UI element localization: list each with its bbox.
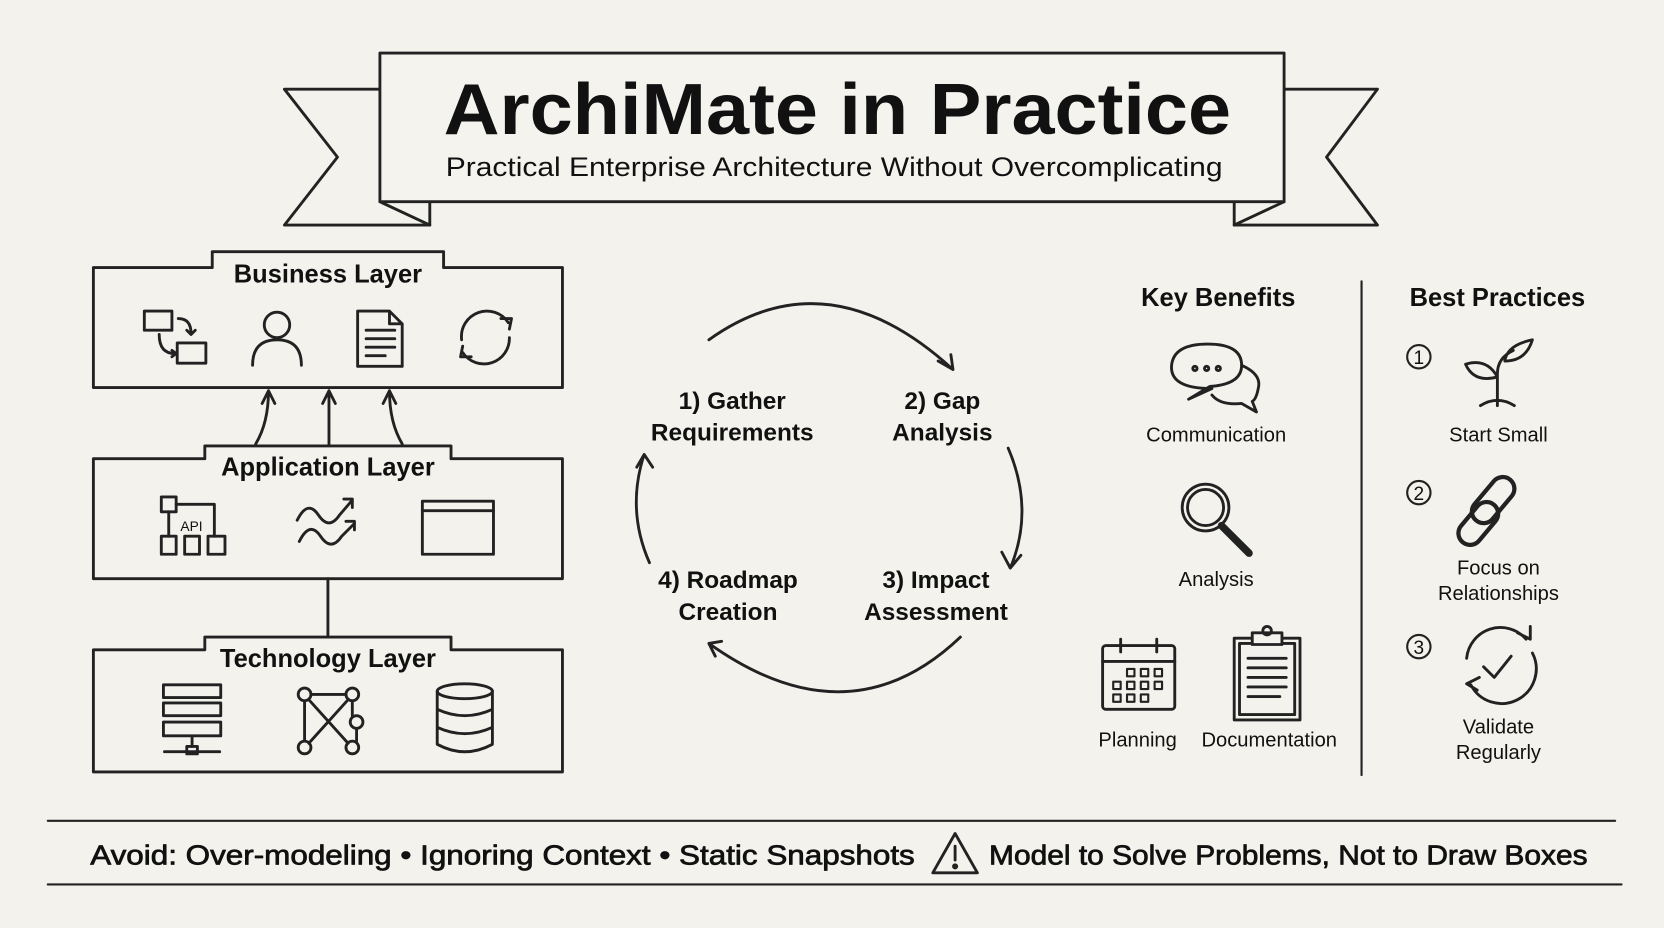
- cycle diagram: 3) Impact: [882, 567, 990, 594]
- icon: server: [163, 685, 221, 754]
- icon: waves: [297, 499, 354, 544]
- panel: application layer: Application Layer: [221, 454, 435, 482]
- icon: person: [253, 312, 301, 365]
- icon: validate cycle: [1467, 626, 1536, 704]
- panel: best practices: Regularly: [1456, 742, 1542, 764]
- cycle diagram: 1) Gather: [679, 388, 786, 415]
- panel: best practices: Focus on: [1457, 557, 1540, 579]
- badge 2: [1407, 481, 1431, 505]
- badge 3: [1407, 635, 1431, 659]
- panel: key benefits: Documentation: [1201, 729, 1337, 751]
- icon: chat: [1171, 344, 1259, 412]
- panel: business layer: Business Layer: [234, 260, 422, 288]
- panel: technology layer: Technology Layer: [220, 645, 436, 673]
- panel: key benefits: Analysis: [1179, 569, 1254, 591]
- badge 2: 2: [1414, 484, 1424, 505]
- title: ArchiMate in Practice: [444, 70, 1231, 150]
- icon: API: API: [180, 519, 203, 534]
- panel: best practices: [1407, 284, 1585, 764]
- panel: best practices: Best Practices: [1410, 284, 1585, 312]
- icon: process: [144, 311, 206, 363]
- subtitle: Practical Enterprise Architecture Without Overcomplicating: [446, 152, 1223, 182]
- icon: cycle: [461, 311, 512, 364]
- arrows: application to business: [256, 391, 402, 444]
- cycle diagram: [636, 304, 1022, 692]
- icon: window: [422, 501, 493, 554]
- badge 3: 3: [1414, 638, 1424, 659]
- cycle diagram: 4) Roadmap: [658, 567, 798, 594]
- panel: application layer: [93, 446, 562, 579]
- icon: API: [161, 497, 225, 554]
- cycle diagram: Creation: [679, 599, 777, 626]
- bottom banner: [48, 821, 1622, 884]
- cycle diagram: Requirements: [651, 420, 814, 447]
- panel: key benefits: [1098, 284, 1337, 751]
- icon: calendar: [1103, 639, 1175, 709]
- banner: [284, 53, 1377, 225]
- panel: key benefits: Key Benefits: [1141, 284, 1295, 312]
- bottom banner: Model to Solve Problems, Not to Draw Boxes: [989, 839, 1588, 870]
- panel: key benefits: Planning: [1098, 729, 1177, 751]
- cycle diagram: 2) Gap: [904, 388, 980, 415]
- panel: technology layer: [93, 637, 562, 772]
- ribbon right tail: [1234, 89, 1377, 225]
- cycle diagram: Analysis: [892, 420, 993, 447]
- bottom banner: Avoid: Over-modeling • Ignoring Context • Static Snapshots: [90, 839, 915, 870]
- icon: document: [358, 311, 402, 366]
- icon: network: [298, 688, 363, 754]
- icon: database: [437, 684, 492, 752]
- icon: sprout: [1466, 340, 1532, 406]
- panel: best practices: Validate: [1463, 717, 1534, 739]
- icon: clipboard: [1234, 626, 1300, 720]
- panel: best practices: Relationships: [1438, 583, 1559, 605]
- ribbon left tail: [284, 89, 430, 225]
- icon: magnifier: [1182, 484, 1249, 553]
- badge 1: 1: [1414, 348, 1424, 369]
- badge 1: [1407, 345, 1431, 369]
- icon: warning: [933, 834, 977, 873]
- panel: key benefits: Communication: [1146, 425, 1286, 447]
- icon: chain: [1454, 472, 1519, 550]
- panel: business layer: [93, 252, 562, 388]
- panel: best practices: Start Small: [1449, 425, 1548, 447]
- cycle diagram: Assessment: [864, 599, 1008, 626]
